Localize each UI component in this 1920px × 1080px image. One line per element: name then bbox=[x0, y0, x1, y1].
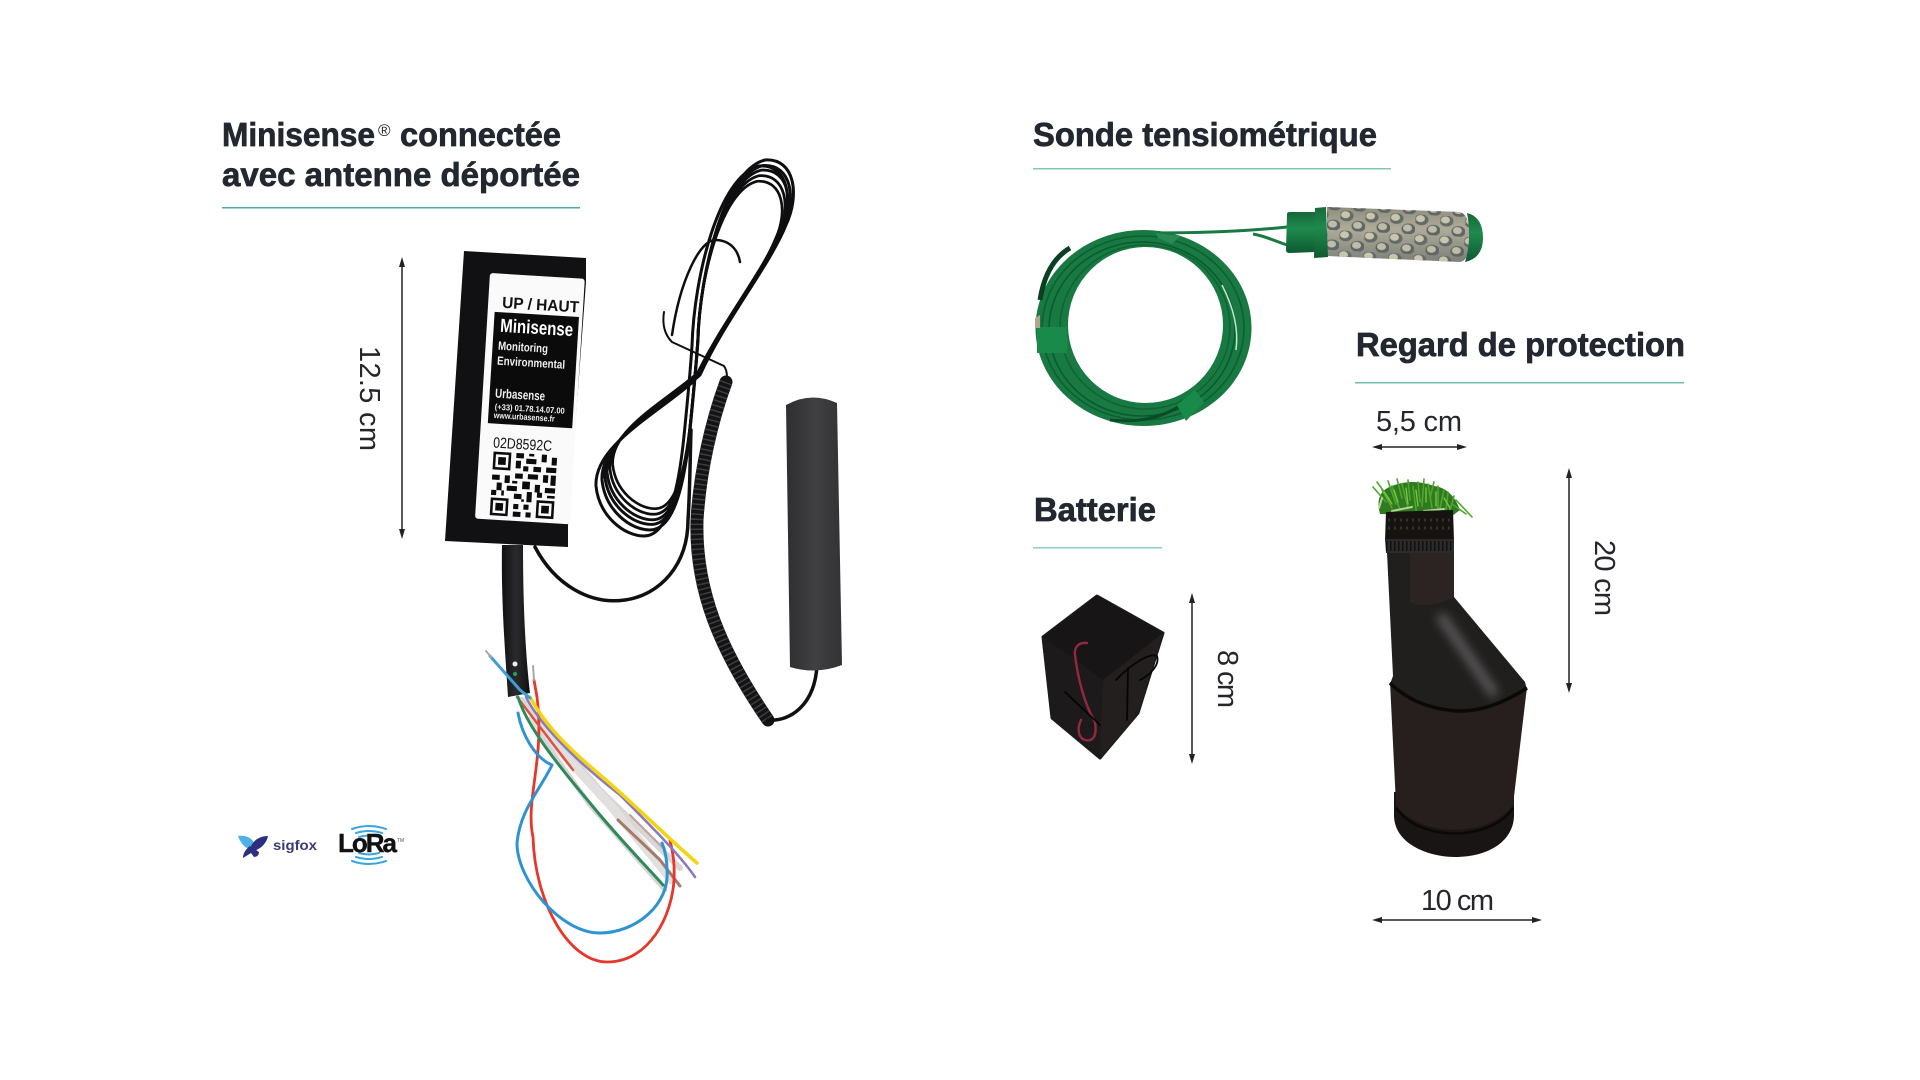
heading: Minisense connectée avec antenne déportée: Minisense bbox=[222, 116, 375, 153]
grass bbox=[1378, 482, 1460, 516]
label text: Environmental bbox=[497, 354, 565, 372]
battery bbox=[1043, 596, 1163, 758]
heading: Minisense connectée avec antenne déportée: avec antenne déportée bbox=[222, 156, 580, 193]
minisense box bbox=[445, 251, 586, 547]
antenna bbox=[786, 397, 842, 671]
label text: Monitoring bbox=[498, 339, 548, 356]
label text: 02D8592C bbox=[493, 435, 553, 455]
thick sensor cable bbox=[502, 545, 530, 697]
dimension arrow: 12.5 cm: 12.5 cm bbox=[353, 346, 385, 451]
dimension arrow: 10 cm bbox=[1372, 885, 1542, 923]
wire ends over the cable bbox=[486, 651, 534, 698]
heading: Regard de protection: Regard de protection bbox=[1356, 326, 1685, 363]
corrugated cable bbox=[697, 382, 817, 720]
heading: Minisense connectée avec antenne déportée: ® bbox=[378, 121, 391, 140]
probe cable to head bbox=[1150, 227, 1287, 245]
dimension arrow: 5,5 cm: 5,5 cm bbox=[1376, 406, 1462, 438]
probe head bbox=[1286, 207, 1483, 262]
QR code bbox=[490, 452, 557, 519]
antenna cable from the box bbox=[535, 430, 691, 601]
label text: (+33) 01.78.14.07.00 bbox=[495, 402, 565, 416]
heading: Batterie: Batterie bbox=[1034, 491, 1156, 528]
soil bbox=[1385, 510, 1454, 541]
logo: LoRa: LoRa bbox=[338, 828, 398, 858]
antenna coil of black cable bbox=[596, 160, 793, 536]
flange bbox=[1394, 792, 1514, 857]
logo: sigfox bbox=[238, 836, 317, 858]
label text bbox=[487, 295, 580, 520]
label bbox=[475, 273, 585, 524]
dimension arrow: 5,5 cm bbox=[1372, 406, 1467, 450]
logo: sigfox: sigfox bbox=[273, 837, 317, 853]
dimension arrow: 8 cm bbox=[1189, 593, 1243, 764]
lower body bbox=[1390, 682, 1527, 830]
cable ties bbox=[1037, 327, 1067, 353]
heading: Sonde tensiométrique: Sonde tensiométrique bbox=[1033, 116, 1377, 153]
heading: Minisense connectée avec antenne déportée: connectée bbox=[400, 116, 561, 153]
dimension arrow: 20 cm: 20 cm bbox=[1588, 540, 1620, 616]
label text: www.urbasense.fr bbox=[493, 410, 556, 424]
heading: Batterie bbox=[1033, 491, 1162, 548]
dimension arrow: 8 cm: 8 cm bbox=[1211, 650, 1243, 708]
label text: Minisense bbox=[500, 316, 574, 341]
dimension arrow: 12.5 cm bbox=[353, 257, 405, 539]
probe: coiled green cable bbox=[1035, 227, 1287, 426]
sensor wires bbox=[517, 680, 697, 962]
dimension arrow: 20 cm bbox=[1566, 468, 1620, 693]
heading: Minisense connectée avec antenne déportée bbox=[222, 116, 580, 208]
protection box with grass bbox=[1373, 479, 1527, 857]
upper body bbox=[1387, 553, 1527, 711]
dimension arrow: 10 cm: 10 cm bbox=[1421, 885, 1494, 917]
logo: LoRa: TM bbox=[397, 838, 404, 844]
label text: Urbasense bbox=[495, 386, 546, 404]
label text: UP / HAUT bbox=[502, 295, 580, 316]
